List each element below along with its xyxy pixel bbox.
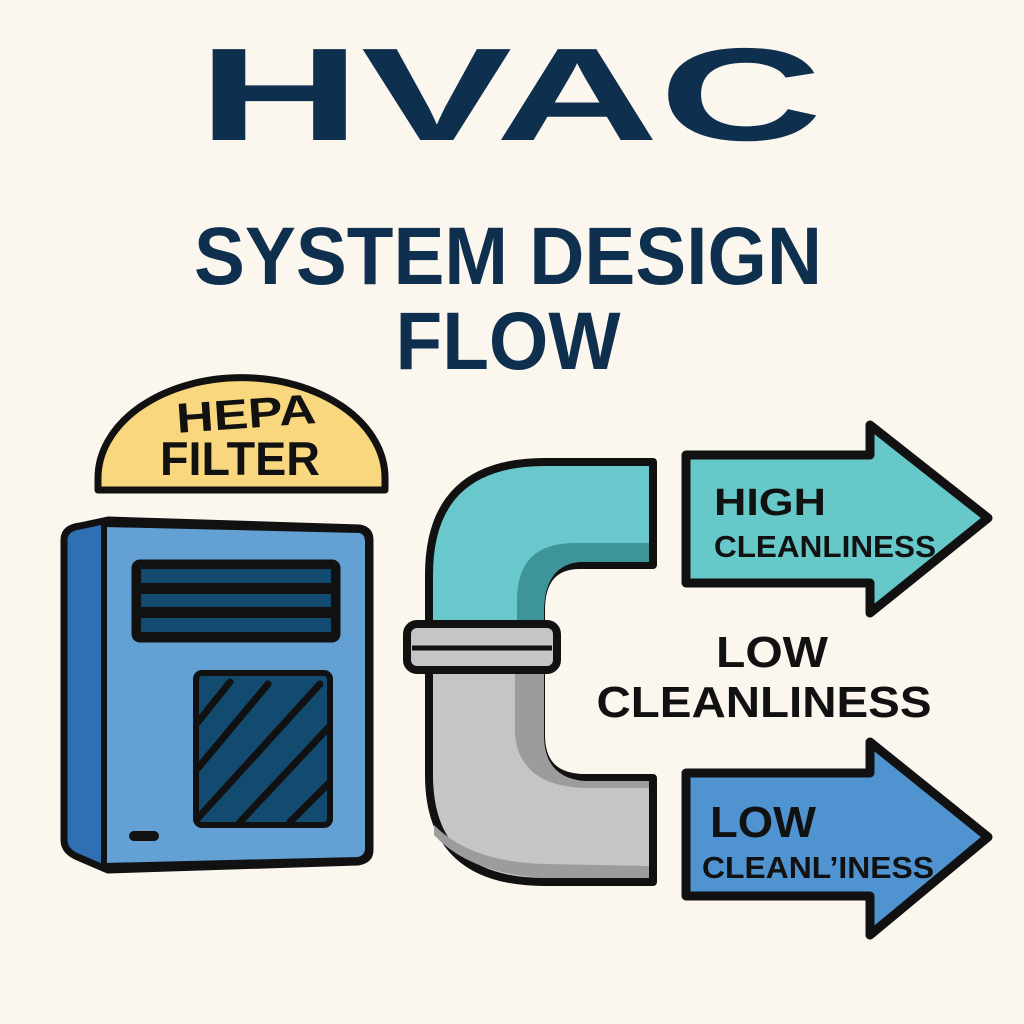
arrow: high cleanliness — [686, 425, 988, 613]
title — [194, 21, 822, 387]
title: FLOW — [396, 296, 621, 387]
title: HVAC — [198, 21, 822, 168]
HEPA filter label dome: HEPA — [175, 385, 318, 442]
arrow: low cleanliness — [686, 742, 988, 935]
indicator — [130, 832, 158, 840]
arrow: high cleanliness: HIGH — [714, 482, 826, 524]
HEPA filter label dome — [98, 378, 385, 490]
middle label: low cleanliness: CLEANLINESS — [596, 678, 932, 727]
arrow: low cleanliness: CLEANL’INESS — [702, 850, 934, 885]
HVAC unit — [64, 520, 370, 870]
HEPA filter label dome: FILTER — [160, 432, 320, 485]
middle label: low cleanliness — [596, 628, 932, 727]
title: SYSTEM DESIGN — [194, 211, 822, 302]
flange — [407, 624, 557, 670]
pipe — [407, 462, 653, 882]
middle label: low cleanliness: LOW — [716, 628, 829, 677]
arrow: high cleanliness: CLEANLINESS — [714, 529, 936, 564]
filter window — [196, 673, 330, 825]
arrow: low cleanliness: LOW — [710, 798, 816, 847]
vent — [132, 560, 340, 642]
